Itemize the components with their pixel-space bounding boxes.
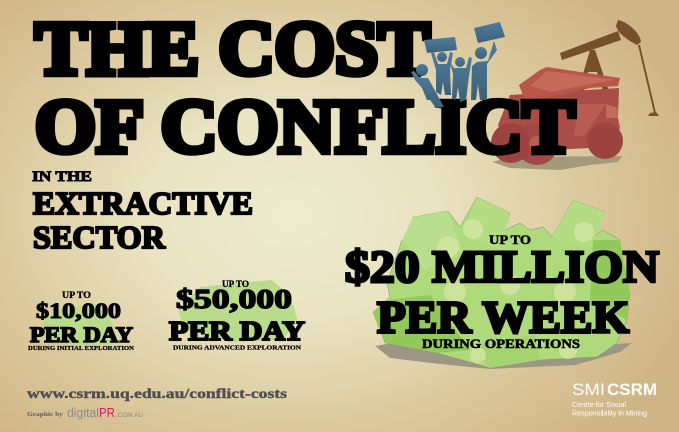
logo: SMI CSRM [572, 381, 657, 418]
label: up to $10,000 per day: $10,000 [36, 298, 121, 323]
label: up to $10,000 per day: DURING INITIAL EXPLORATION [28, 345, 134, 352]
label: up to $50,000 per day: UP TO [222, 279, 249, 289]
label: up to $20 million per week: UP TO [489, 232, 531, 247]
logo: SMI CSRM: Responsibility in Mining [572, 408, 647, 418]
credit: digitalPR: .COM.AU [116, 412, 143, 419]
label: up to $20 million per week: DURING OPERATIONS [422, 336, 580, 351]
subtitle: EXTRACTIVE [33, 185, 253, 221]
logo: SMI CSRM: CSRM [607, 381, 657, 399]
credit: digitalPR: digital [67, 405, 99, 420]
icon: oil pump [560, 20, 659, 116]
label: up to $10,000 per day: UP TO [62, 290, 91, 300]
credit: digitalPR [27, 405, 143, 420]
label: up to $10,000 per day: PER DAY [30, 322, 133, 347]
credit: digitalPR: Graphic by [27, 411, 64, 418]
label: up to $10,000 per day [28, 290, 134, 352]
subtitle: SECTOR [33, 219, 166, 255]
label: up to $20 million per week: PER WEEK [377, 292, 629, 342]
title: THE COST [35, 7, 430, 91]
label: up to $50,000 per day: DURING ADVANCED EXPLORATION [173, 344, 301, 352]
label: up to $20 million per week [345, 232, 659, 351]
logo: SMI CSRM: Centre for Social [572, 400, 626, 409]
icon: medium money pile [178, 280, 298, 342]
icon: protesters with placards [411, 22, 505, 108]
title [35, 7, 575, 169]
label: up to $20 million per week: $20 MILLION [345, 242, 659, 292]
label: up to $50,000 per day: $50,000 [176, 284, 292, 314]
label: up to $50,000 per day [169, 279, 305, 352]
icon: mining truck [491, 67, 623, 170]
title: OF CONFLICT [35, 85, 575, 169]
logo: SMI CSRM: SMI [572, 381, 605, 399]
icon: small money pile [43, 303, 120, 345]
credit: digitalPR: PR [99, 405, 115, 420]
label: up to $50,000 per day: PER DAY [169, 316, 305, 346]
subtitle: IN THE [32, 169, 92, 185]
subtitle [32, 169, 253, 255]
website url: www.csrm.uq.edu.au/conflict-costs [27, 387, 288, 402]
icon: large money pile [373, 197, 632, 369]
